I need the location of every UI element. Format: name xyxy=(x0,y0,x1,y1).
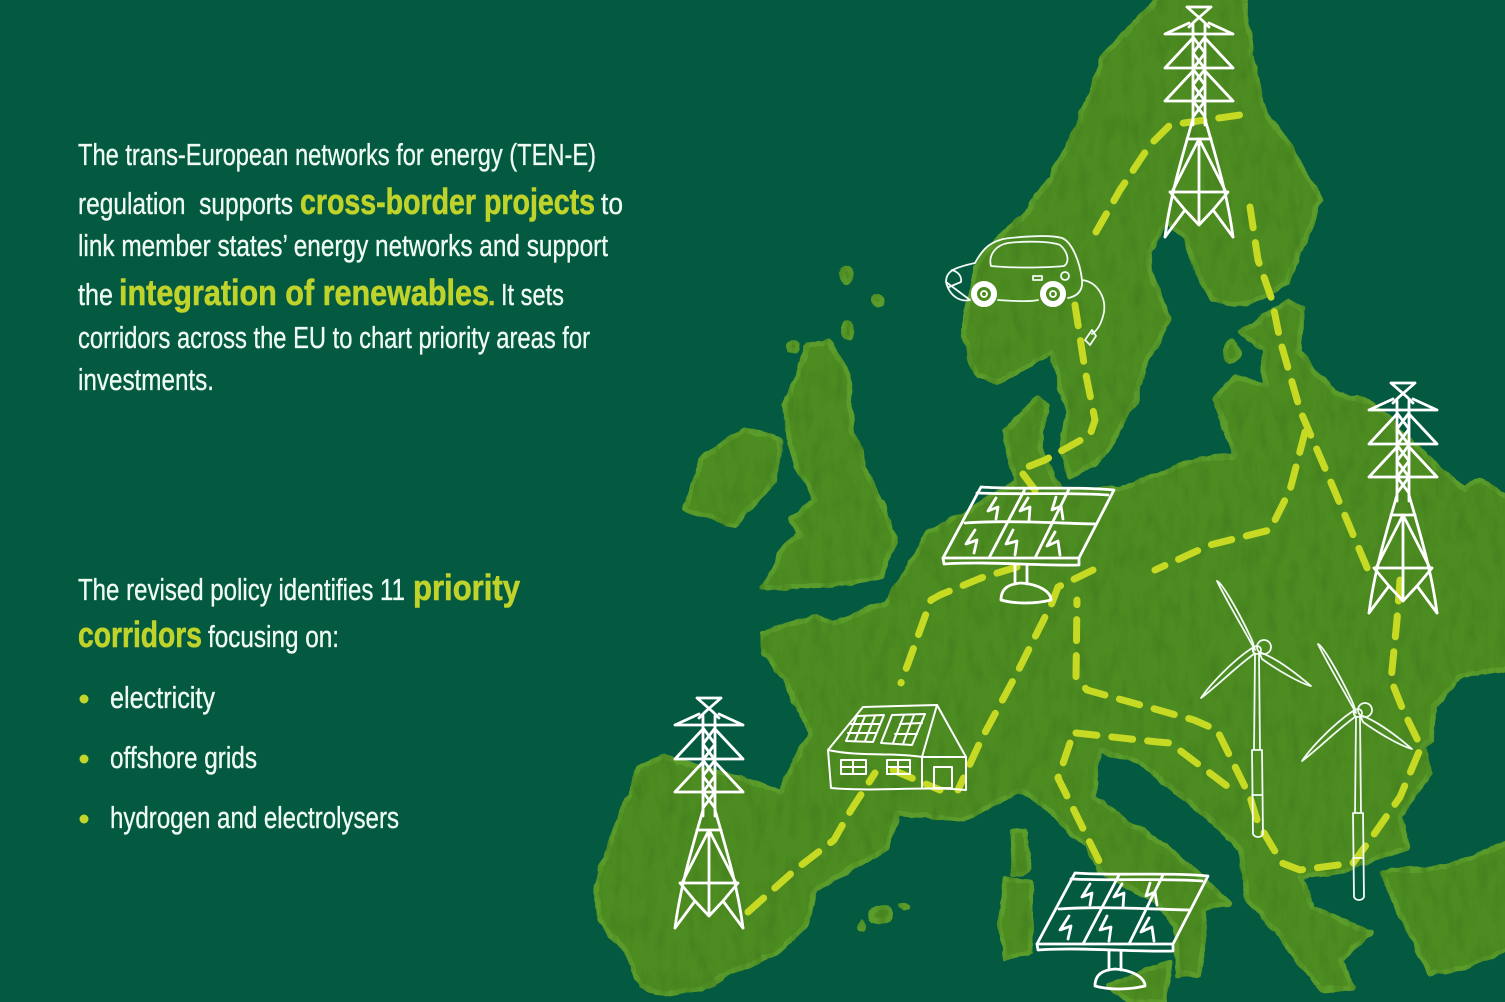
text block: priority corridors intro: focusing on: xyxy=(208,619,339,654)
icon: pylon east xyxy=(1369,383,1437,613)
icon: solar panel north xyxy=(943,487,1114,603)
text block: priority corridors intro: corridors xyxy=(78,614,202,655)
icon: pylon south-west xyxy=(675,698,743,928)
icon: house with solar roof xyxy=(828,705,966,790)
text block: priority corridors intro: The revised policy identifies 11 xyxy=(78,572,405,607)
text block: TEN-E regulation: . xyxy=(488,281,495,311)
text block: TEN-E regulation: to xyxy=(601,186,623,221)
bullet list: corridor focus areas: electricity xyxy=(110,680,215,715)
text block: TEN-E regulation: corridors across the EU to chart priority areas for xyxy=(78,320,590,355)
icon: solar panel south xyxy=(1037,873,1208,989)
text block: TEN-E regulation: regulation supports xyxy=(78,186,293,221)
text block: TEN-E regulation: the xyxy=(78,277,113,312)
icon: wind turbine right xyxy=(1302,644,1412,900)
energy corridors xyxy=(748,115,1421,912)
icon: wind turbine left xyxy=(1201,581,1311,837)
bullet list: corridor focus areas: hydrogen and electrolysers xyxy=(110,800,399,835)
text block: TEN-E regulation: investments. xyxy=(78,362,214,397)
icon: pylon north xyxy=(1165,7,1233,237)
text block: TEN-E regulation: The trans-European networks for energy (TEN-E) xyxy=(78,137,596,172)
map of Europe xyxy=(596,0,1505,1002)
bullet list: corridor focus areas: offshore grids xyxy=(110,740,257,775)
text block: TEN-E regulation: link member states’ energy networks and support xyxy=(78,228,608,263)
text block: TEN-E regulation xyxy=(78,137,623,397)
text block: TEN-E regulation: cross-border projects xyxy=(300,181,595,222)
bullet list: corridor focus areas xyxy=(80,680,399,835)
text block: TEN-E regulation: It sets xyxy=(501,277,564,312)
text block: TEN-E regulation: integration of renewables xyxy=(119,272,489,313)
text block: priority corridors intro: priority xyxy=(413,567,520,608)
icon: electric car xyxy=(946,236,1104,345)
text block: priority corridors intro xyxy=(78,567,520,655)
